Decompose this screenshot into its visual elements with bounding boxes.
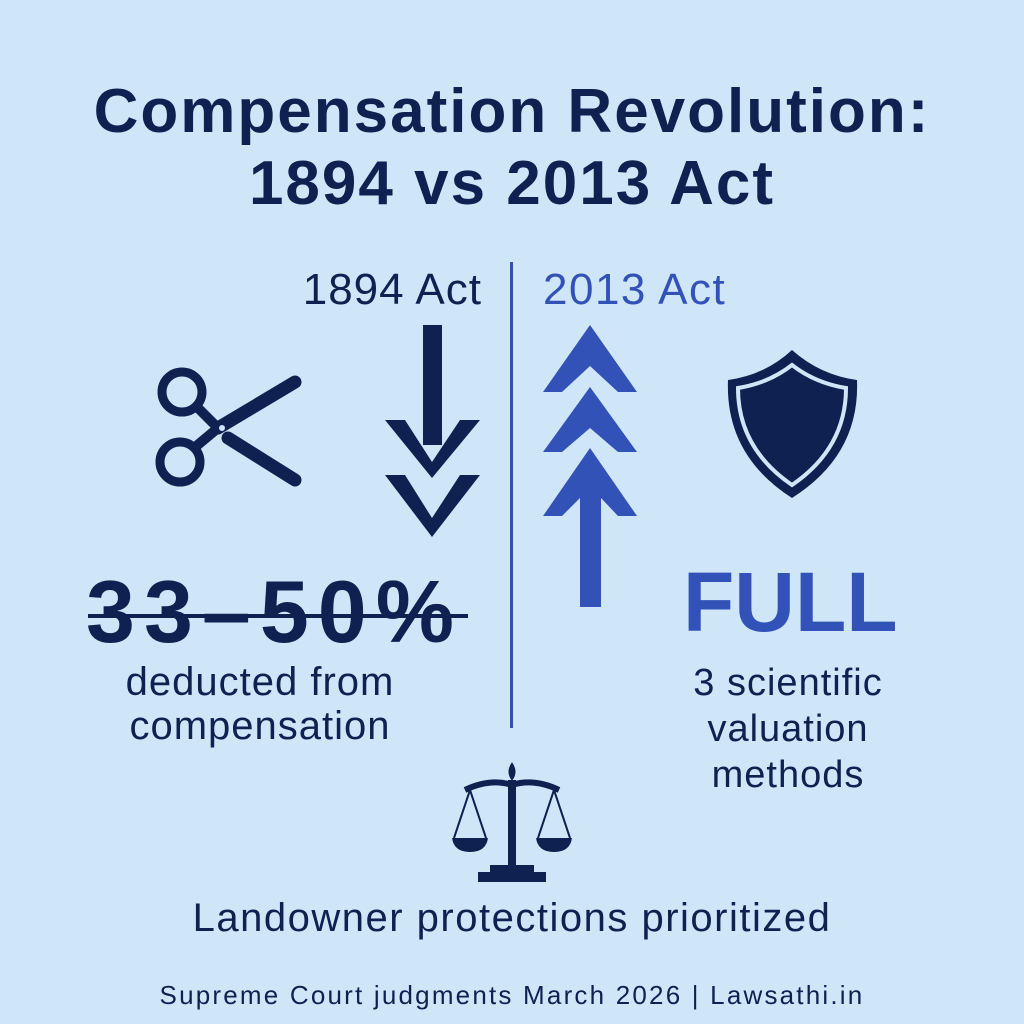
stat: FULL: FULL [683,555,898,649]
text: 3 scientific valuation methods: 3 scientific [693,662,883,704]
text: 3 scientific valuation methods [693,662,883,796]
text: deducted from compensation: deducted from [126,660,394,704]
title: Compensation Revolution: [94,77,930,146]
heading: 1894 Act: 1894 Act [303,265,482,314]
title: 1894 vs 2013 Act [249,149,775,218]
heading: 2013 Act: 2013 Act [543,265,726,314]
text: 3 scientific valuation methods: methods [712,754,864,796]
divider [510,262,513,728]
footer: Supreme Court judgments March 2026 | Lawsathi.in [160,980,864,1010]
text: deducted from compensation: compensation [129,704,391,748]
icon: scales of justice [452,763,572,882]
icon: scissors [160,372,295,482]
text: landowner protections: Landowner protections prioritized [193,896,831,940]
stat: 33-50%: 33–50% [86,562,463,661]
strikethrough line [88,614,468,618]
text: deducted from compensation [126,660,394,748]
text: 3 scientific valuation methods: valuation [707,708,869,750]
icon: up arrows [543,325,637,607]
title [94,77,930,218]
icon: down arrow [385,325,480,537]
icon: shield [728,350,857,498]
